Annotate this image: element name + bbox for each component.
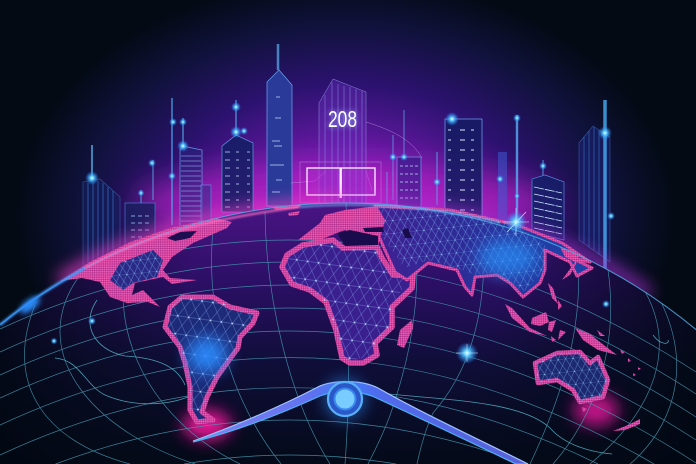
continent: Madagascar	[397, 320, 413, 348]
asia blue glow	[477, 240, 537, 276]
building 9	[498, 115, 517, 232]
hudson bay	[167, 231, 197, 241]
latitude and longitude grid	[0, 203, 696, 464]
continent: Africa	[282, 240, 413, 363]
australia mesh	[535, 352, 608, 402]
label: 208: 208	[328, 106, 357, 132]
continent: Australia	[535, 352, 608, 412]
eurasia mesh	[372, 208, 545, 292]
south america mesh	[165, 297, 257, 412]
decorative swirl lines	[55, 300, 668, 454]
europe	[271, 204, 385, 246]
chart frame with white box	[291, 122, 422, 203]
north america mesh	[110, 250, 163, 290]
mediterranean and inland seas	[337, 230, 378, 246]
building 1	[83, 145, 120, 290]
globe glows	[183, 394, 618, 440]
building 10	[532, 160, 564, 240]
continent: North America	[60, 218, 232, 307]
building 7	[387, 110, 421, 207]
globe body	[0, 203, 696, 464]
city skyline	[83, 44, 610, 290]
building 5	[267, 44, 292, 206]
building 2	[125, 98, 172, 249]
bottom ribbon arc	[193, 382, 528, 464]
building 6	[319, 79, 366, 206]
continent: Europe and Asia	[271, 204, 592, 297]
building 8	[437, 119, 482, 217]
rim glow	[60, 204, 650, 295]
globe rim line	[0, 203, 696, 330]
continent: Southeast Asia islands	[505, 247, 641, 376]
south america blue glow	[187, 337, 227, 373]
africa mesh	[284, 242, 410, 361]
building 4	[222, 100, 253, 212]
building 3	[180, 118, 211, 228]
location marker rings	[325, 379, 365, 419]
building 11	[579, 100, 610, 284]
continent: South America	[165, 297, 257, 422]
star lights	[50, 102, 615, 364]
continent: New Zealand	[613, 419, 640, 431]
